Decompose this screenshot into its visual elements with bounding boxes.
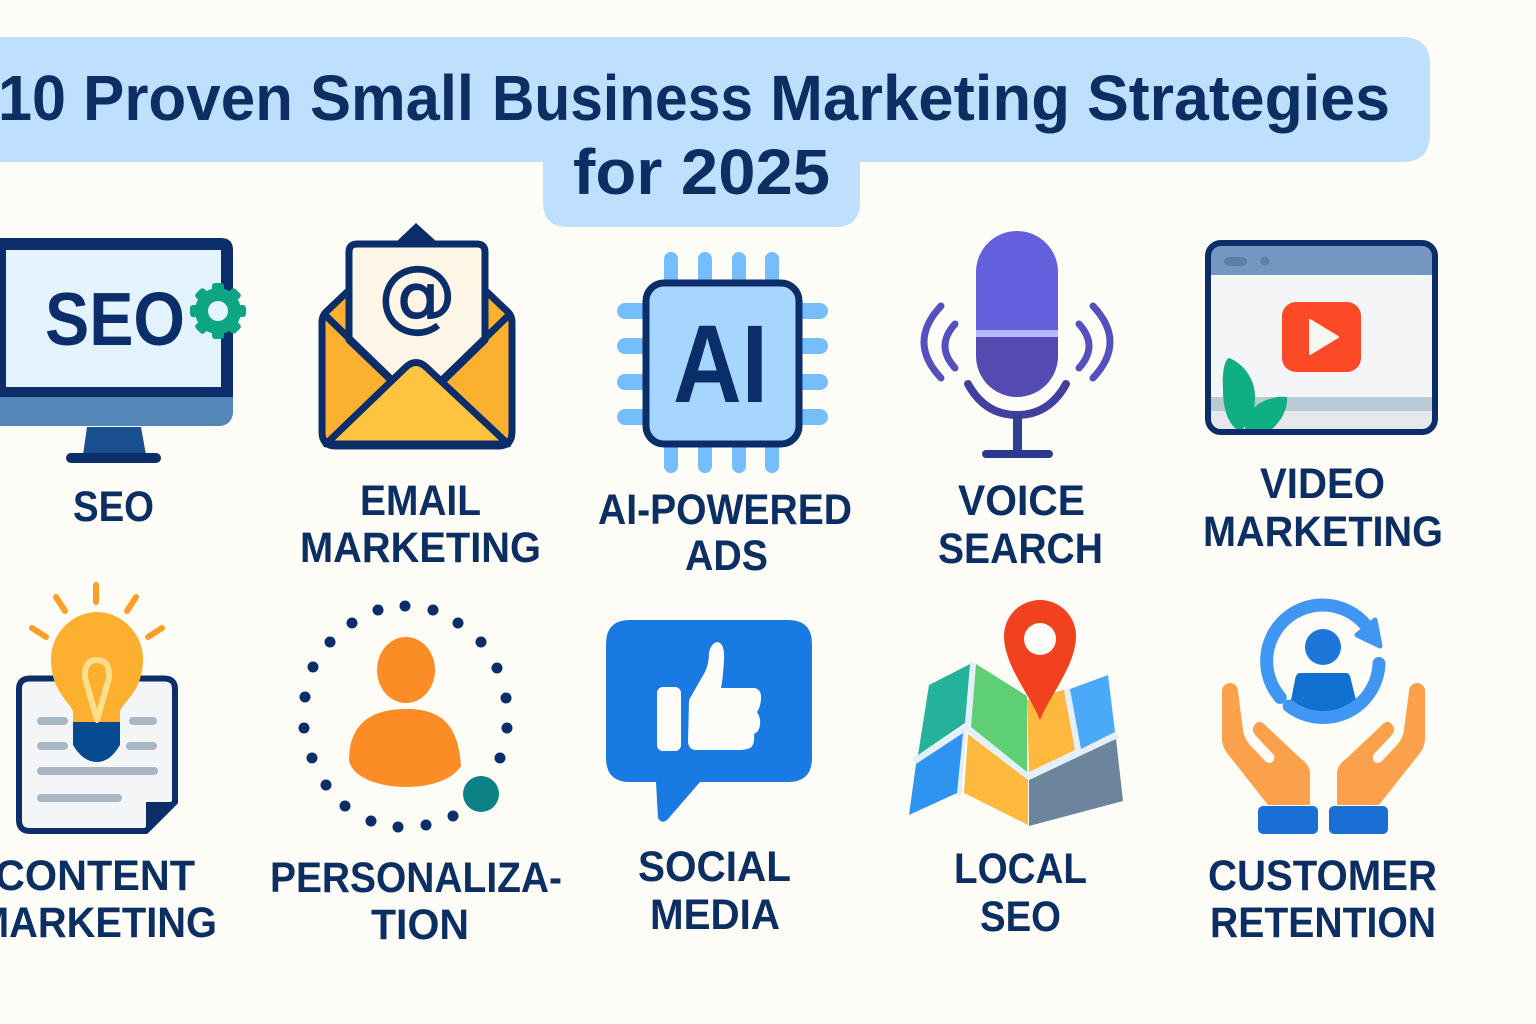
label: AI-powered ads: AI-POWERED [598,486,852,534]
panel: video marketing [1203,243,1443,556]
icon: folded map with pin [909,600,1123,826]
icon: person with dotted ring [298,600,512,832]
panel: content marketing [0,585,217,947]
title text: Strategies [1087,62,1390,134]
icon: monitor with gear [0,238,246,463]
panel: personalization [270,600,562,949]
label: social media [638,843,791,939]
label: video marketing: VIDEO [1260,460,1385,508]
label: video marketing [1203,460,1443,556]
title text: Small [310,62,474,134]
title banner [0,37,1430,227]
icon: hands holding customer loop [1222,605,1425,834]
title background [0,37,1430,227]
panel: social media [606,620,812,939]
icon: open envelope [322,223,512,446]
label: SEO: SEO [73,483,154,531]
panel: AI-powered ads [598,252,852,580]
panel: email marketing [300,223,541,572]
label: AI-powered ads: ADS [685,532,768,580]
panel: local SEO [909,600,1123,941]
label: customer retention [1208,852,1437,947]
title text: Marketing [770,62,1070,134]
title text [0,62,1390,208]
panel: customer retention [1208,605,1437,947]
icon: video window [1208,243,1435,432]
icon: AI chip [617,252,828,473]
label: video marketing: MARKETING [1203,508,1443,556]
label: AI-powered ads [598,486,852,580]
label: email marketing: EMAIL [360,477,481,525]
label: personalization: PERSONALIZA- [270,854,562,902]
label: local SEO [954,845,1087,941]
label: local SEO: LOCAL [954,845,1087,893]
icon: monitor with gear: SEO [45,277,185,361]
icon: AI chip: AI [673,303,768,426]
icon: open envelope: @ [378,251,456,341]
label: social media: SOCIAL [638,843,791,891]
title text: 10 [0,62,66,134]
label: content marketing: CONTENT [0,852,195,900]
label: personalization: TION [371,901,469,949]
label: content marketing [0,852,217,947]
icon: microphone [924,231,1110,458]
label: social media: MEDIA [650,891,780,939]
label: email marketing [300,477,541,572]
label: email marketing: MARKETING [300,524,541,572]
label: voice search: SEARCH [938,525,1103,573]
label: voice search: VOICE [958,477,1085,525]
label: customer retention: CUSTOMER [1208,852,1437,900]
title text: Business [492,62,753,134]
label: personalization [270,854,562,949]
label: customer retention: RETENTION [1210,899,1436,947]
label: voice search [938,477,1103,573]
panel: SEO [0,238,246,531]
title text: for 2025 [573,136,830,208]
title text: Proven [83,62,293,134]
panel: voice search [924,231,1110,573]
icon: lightbulb and document [19,585,178,834]
label: local SEO: SEO [980,893,1061,941]
icon: thumbs up speech bubble [606,620,812,822]
